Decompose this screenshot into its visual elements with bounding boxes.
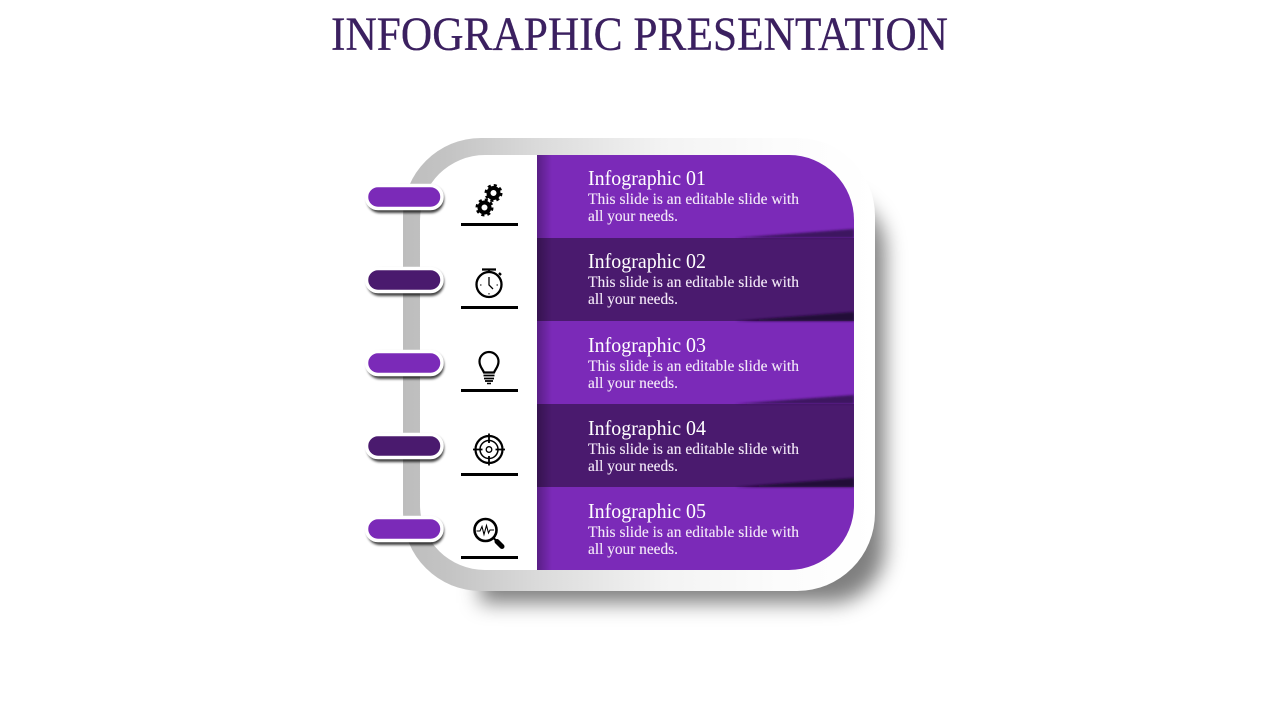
notebook card (403, 138, 885, 603)
fold shadow 1 (735, 229, 854, 238)
card frame (403, 138, 875, 591)
card shadow (480, 195, 885, 603)
icon underline 3 (461, 389, 518, 392)
text block 1: This slide is an editable slide with (588, 191, 799, 208)
title: INFOGRAPHIC PRESENTATION (331, 8, 948, 61)
text block 5: This slide is an editable slide with (588, 524, 799, 541)
inner white panel (420, 155, 854, 570)
icon underline 1 (461, 223, 518, 226)
text block 5: all your needs. (588, 541, 678, 558)
pill tab 1 (366, 186, 444, 213)
text block 2: This slide is an editable slide with (588, 274, 799, 291)
fold shadow 2 (735, 312, 854, 321)
text block 4: Infographic 04 (588, 416, 706, 440)
purple content panel (537, 155, 854, 570)
icon: magnifier with pulse (474, 519, 502, 546)
text block 2 (588, 249, 799, 308)
pill tab 4 (366, 434, 444, 462)
fold shadow 4 (735, 478, 854, 487)
text block 5 (588, 499, 799, 558)
icon underline 5 (461, 556, 518, 559)
pill tab 3 (366, 352, 444, 379)
icon: target (473, 434, 505, 466)
row band 1 (537, 155, 854, 238)
fold shadow 3 (735, 395, 854, 404)
row band 2 (537, 238, 854, 321)
pill tab 5 (366, 518, 444, 545)
text block 3: all your needs. (588, 375, 678, 392)
text block 5: Infographic 05 (588, 499, 706, 523)
row band 3 (537, 321, 854, 404)
text block 1: all your needs. (588, 208, 678, 225)
row band 4 (537, 404, 854, 487)
text block 4 (588, 416, 799, 475)
text block 4: all your needs. (588, 458, 678, 475)
icon underline 4 (461, 473, 518, 476)
text block 4: This slide is an editable slide with (588, 441, 799, 458)
text block 1 (588, 166, 799, 225)
text block 3: This slide is an editable slide with (588, 358, 799, 375)
icon: gears (477, 186, 501, 215)
row band 5 (537, 487, 854, 570)
pill tab 2 (366, 268, 444, 296)
text block 2: Infographic 02 (588, 249, 706, 273)
left edge shading (537, 155, 550, 570)
text block 3 (588, 333, 799, 392)
icon: stopwatch (476, 270, 502, 297)
text block 2: all your needs. (588, 291, 678, 308)
text block 3: Infographic 03 (588, 333, 706, 357)
icon: light bulb (480, 352, 498, 384)
icon underline 2 (461, 306, 518, 309)
text block 1: Infographic 01 (588, 166, 706, 190)
